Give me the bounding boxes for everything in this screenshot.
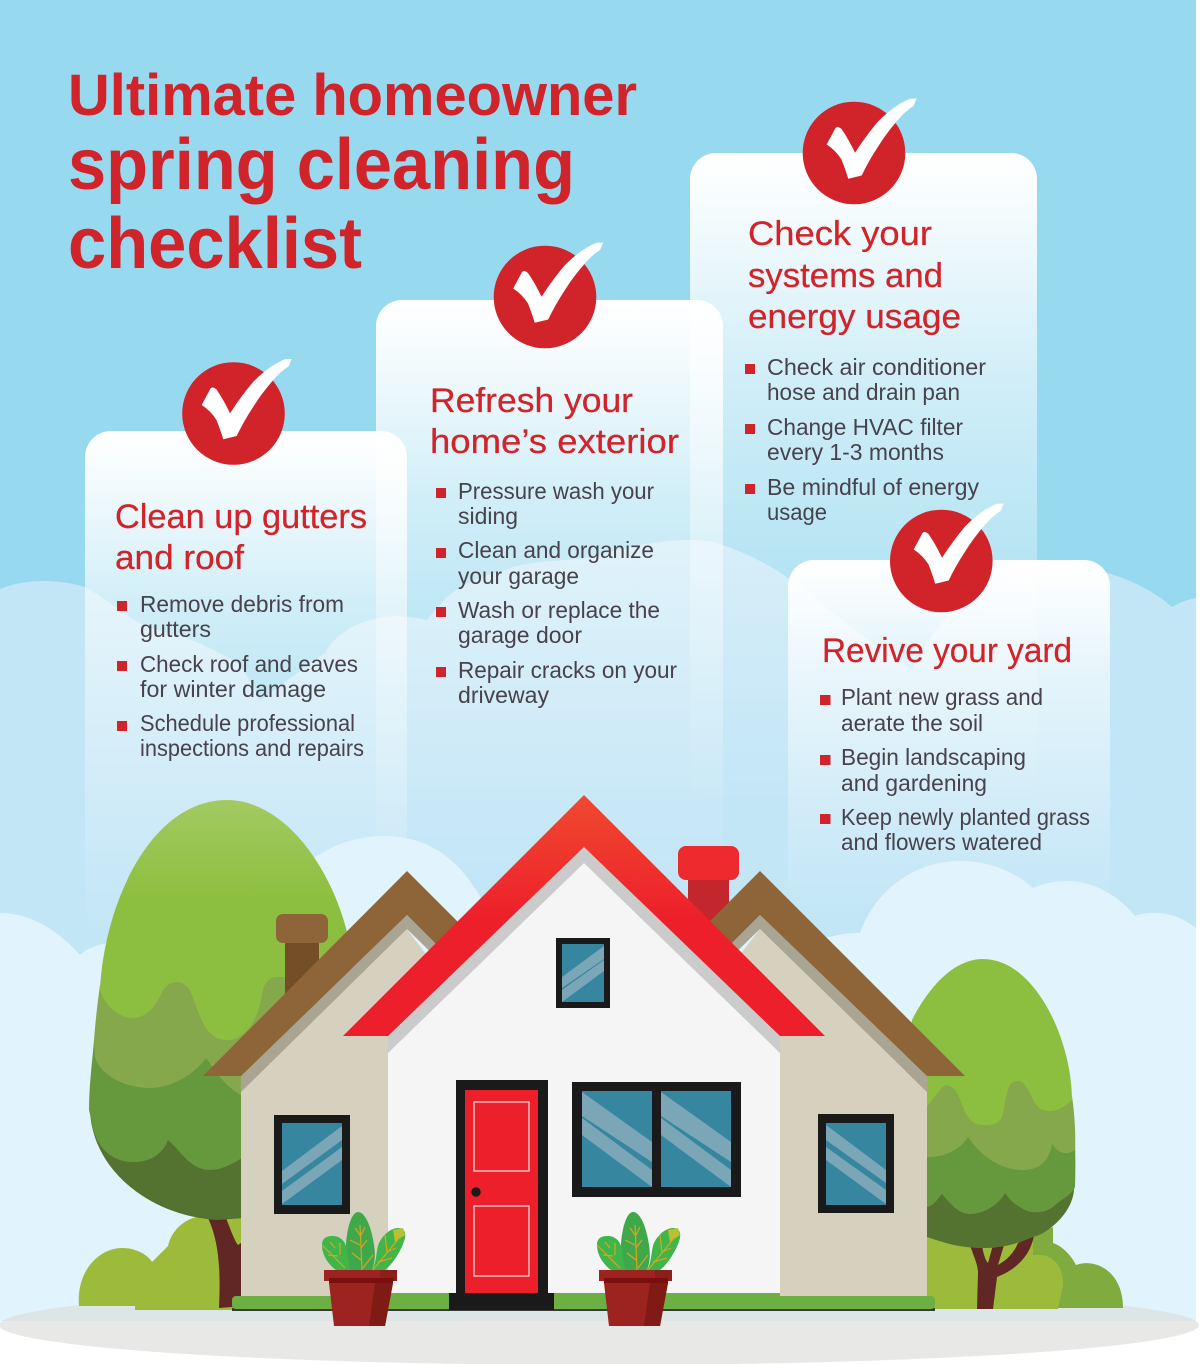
attic window — [556, 938, 610, 1008]
checklist text: Check roof and eaves — [140, 651, 358, 677]
heading: home’s exterior — [430, 423, 679, 461]
right wing — [692, 871, 965, 1297]
red roof — [343, 795, 825, 1036]
heading: Check your — [748, 215, 932, 253]
section: refresh your home's exterior — [430, 242, 679, 708]
heading — [430, 382, 679, 461]
front door — [449, 1080, 554, 1310]
right bushes — [927, 1227, 1123, 1309]
checklist text: every 1-3 months — [767, 439, 944, 465]
checklist text: garage door — [458, 622, 582, 648]
checklist text: Repair cracks on your — [458, 657, 677, 683]
right tree — [900, 959, 1075, 1309]
checklist text: aerate the soil — [841, 710, 983, 736]
left potted plant — [322, 1212, 405, 1326]
checklist text: inspections and repairs — [140, 735, 364, 761]
checklist text: Begin landscaping — [841, 744, 1026, 770]
panel: revive your yard background — [788, 560, 1110, 910]
roof trim — [388, 847, 780, 1053]
panel: refresh your home's exterior background — [376, 300, 723, 880]
checklist text: and gardening — [841, 770, 987, 796]
left wing — [203, 871, 475, 1297]
checklist text: your garage — [458, 563, 579, 589]
heading: energy usage — [748, 298, 961, 336]
checklist text: Clean and organize — [458, 537, 654, 563]
checklist text: Plant new grass and — [841, 684, 1043, 710]
checklist text: Change HVAC filter — [767, 414, 963, 440]
left chimney — [276, 914, 328, 1010]
right potted plant — [597, 1212, 680, 1326]
title — [68, 63, 637, 284]
house — [203, 795, 965, 1326]
title: checklist — [68, 204, 362, 284]
heading — [748, 215, 961, 336]
checklist text: siding — [458, 503, 518, 529]
section: revive your yard — [820, 504, 1090, 855]
title: Ultimate homeowner — [68, 63, 637, 128]
left bushes — [79, 1216, 245, 1310]
checklist text: Keep newly planted grass — [841, 804, 1090, 830]
lawn strip — [232, 1293, 935, 1311]
title: spring cleaning — [68, 125, 575, 205]
main wall — [388, 863, 780, 1297]
checklist text — [436, 478, 677, 708]
checklist text: Remove debris from — [140, 591, 344, 617]
front clouds — [0, 836, 1196, 1330]
right chimney — [678, 846, 739, 948]
front window — [572, 1082, 741, 1197]
checklist text: for winter damage — [140, 676, 326, 702]
back clouds — [0, 540, 1196, 1330]
checklist text: hose and drain pan — [767, 379, 960, 405]
section: check your systems and energy usage — [745, 98, 986, 525]
left window — [274, 1115, 350, 1214]
checklist text: Be mindful of energy — [767, 474, 980, 500]
checklist text: Check air conditioner — [767, 354, 986, 380]
panel: check your systems and energy usage background — [690, 153, 1037, 803]
right window — [818, 1114, 894, 1213]
heading: and roof — [115, 539, 245, 577]
checklist text — [117, 591, 364, 761]
icon: check badge — [494, 242, 603, 348]
checklist text: driveway — [458, 682, 549, 708]
icon: check badge — [803, 98, 917, 204]
heading: Revive your yard — [822, 632, 1072, 670]
checklist text: Wash or replace the — [458, 597, 660, 623]
checklist text — [820, 684, 1090, 855]
checklist text: gutters — [140, 616, 211, 642]
left tree — [89, 800, 352, 1308]
checklist text: usage — [767, 499, 827, 525]
section: clean up gutters and roof — [115, 359, 367, 761]
heading: Refresh your — [430, 382, 633, 420]
checklist text — [745, 354, 986, 525]
icon: check badge — [890, 504, 1004, 612]
heading: Clean up gutters — [115, 498, 367, 536]
checklist text: Pressure wash your — [458, 478, 654, 504]
checklist text: Schedule professional — [140, 710, 355, 736]
checklist text: and flowers watered — [841, 829, 1042, 855]
heading: systems and — [748, 257, 943, 295]
heading — [115, 498, 367, 577]
icon: check badge — [182, 359, 292, 465]
panel: clean up gutters and roof background — [85, 431, 407, 931]
